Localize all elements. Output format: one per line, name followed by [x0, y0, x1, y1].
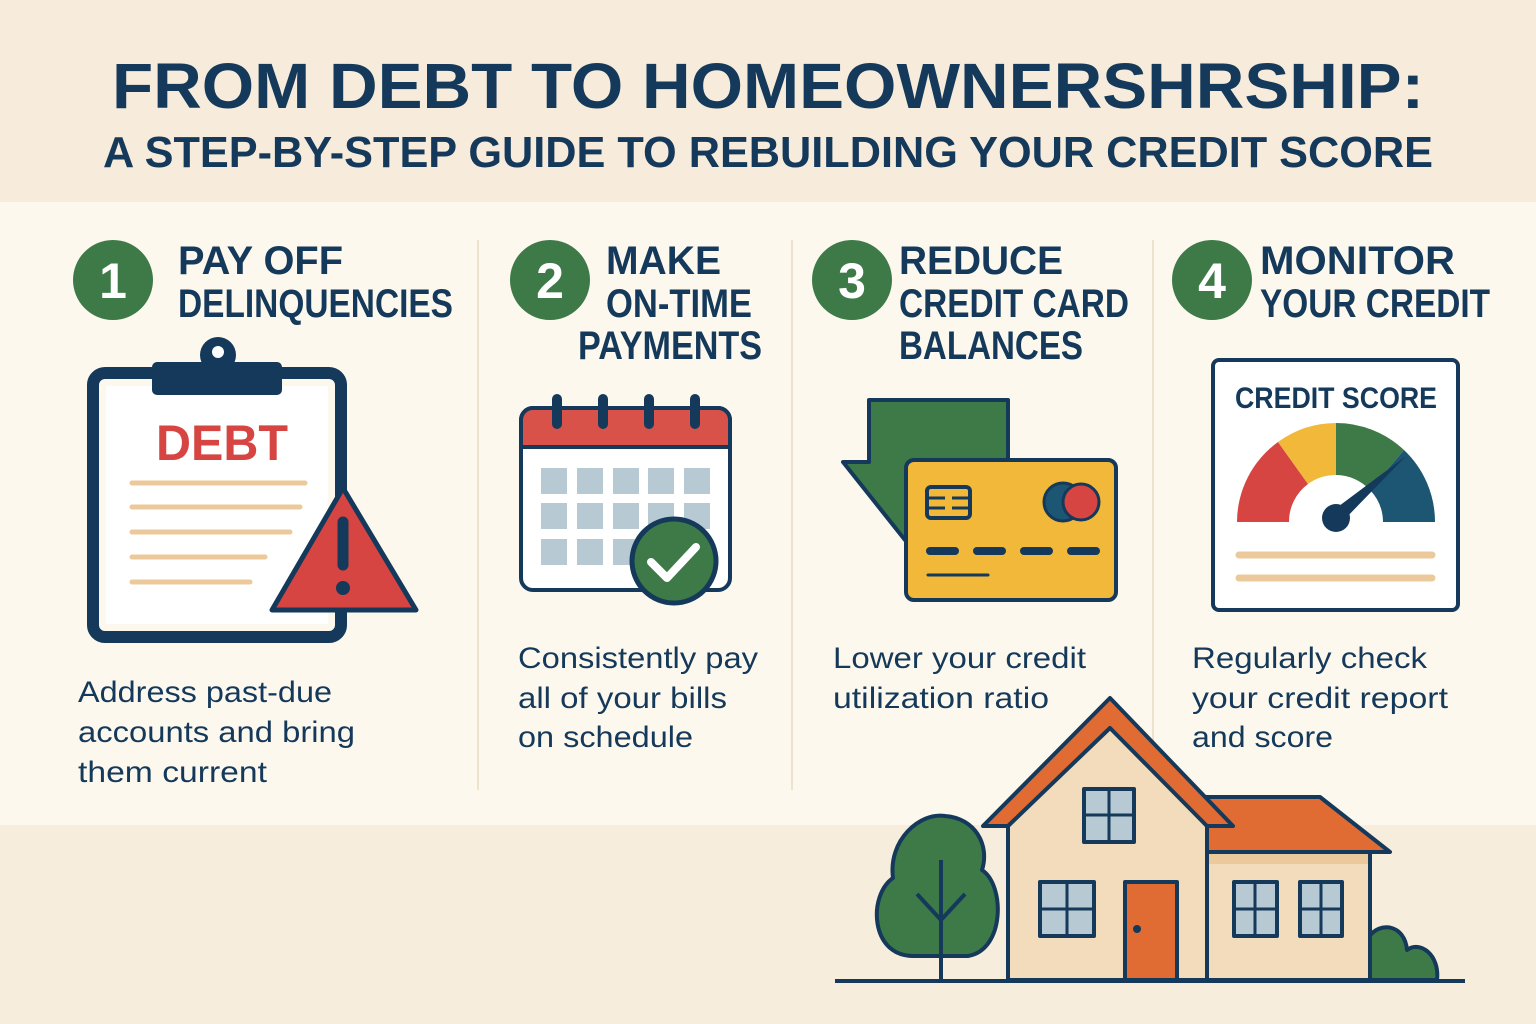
illustration: house	[835, 698, 1465, 981]
subtitle: A STEP-BY-STEP GUIDE TO REBUILDING YOUR CREDIT SCORE	[103, 128, 1433, 177]
icon: credit score gauge card	[1213, 360, 1458, 610]
step 4 text: Regularly check	[1192, 642, 1428, 675]
icon: clipboard debt: DEBT	[156, 415, 288, 471]
step 1 badge	[73, 240, 153, 320]
step 3 heading	[899, 239, 1129, 368]
step 4 badge: 4	[1198, 253, 1226, 309]
step 3 text	[833, 642, 1087, 715]
step 3 heading: REDUCE	[899, 239, 1063, 283]
step 2 text: Consistently pay	[518, 642, 758, 675]
step 2 text: all of your bills	[518, 682, 727, 715]
step 2 heading	[578, 239, 762, 368]
icon: clipboard debt	[93, 337, 416, 637]
step 2 heading: ON-TIME	[606, 282, 752, 326]
step 1 text: Address past-due	[78, 676, 332, 709]
title: FROM DEBT TO HOMEOWNERSHRSHIP:	[112, 50, 1424, 122]
panel: step 2	[510, 239, 762, 754]
step 3 text: Lower your credit	[833, 642, 1087, 675]
step 3 heading: BALANCES	[899, 324, 1083, 368]
icon: credit score gauge card: CREDIT SCORE	[1235, 382, 1437, 415]
step 1 badge: 1	[99, 253, 127, 309]
step 3 badge	[812, 240, 892, 320]
panel: step 4	[1172, 239, 1490, 754]
bush	[1368, 927, 1437, 980]
step 1 heading: PAY OFF	[178, 239, 343, 283]
step 2 text	[518, 642, 758, 754]
step 4 heading	[1260, 239, 1490, 326]
step 3 heading: CREDIT CARD	[899, 282, 1129, 326]
step 2 badge	[510, 240, 590, 320]
step 1 text	[78, 676, 355, 789]
title	[103, 50, 1433, 177]
step 2 heading: PAYMENTS	[578, 324, 762, 368]
step 2 text: on schedule	[518, 721, 693, 754]
step 3 text: utilization ratio	[833, 682, 1049, 715]
step 4 text: your credit report	[1192, 682, 1449, 715]
step 1 text: them current	[78, 756, 268, 789]
step 3 badge: 3	[838, 253, 866, 309]
step 1 heading	[178, 239, 453, 326]
step 1 heading: DELINQUENCIES	[178, 282, 453, 326]
panel: step 1	[73, 239, 453, 789]
step 1 text: accounts and bring	[78, 716, 355, 749]
step 4 heading: MONITOR	[1260, 239, 1455, 283]
step 4 text: and score	[1192, 721, 1333, 754]
step 4 badge	[1172, 240, 1252, 320]
tree	[877, 816, 998, 980]
panel: step 3	[812, 239, 1129, 715]
step 4 text	[1192, 642, 1449, 754]
step 2 badge: 2	[536, 253, 564, 309]
icon: down arrow and credit card	[843, 400, 1116, 600]
icon: calendar with check	[521, 399, 730, 603]
step 4 heading: YOUR CREDIT	[1260, 282, 1490, 326]
step 2 heading: MAKE	[606, 239, 721, 283]
